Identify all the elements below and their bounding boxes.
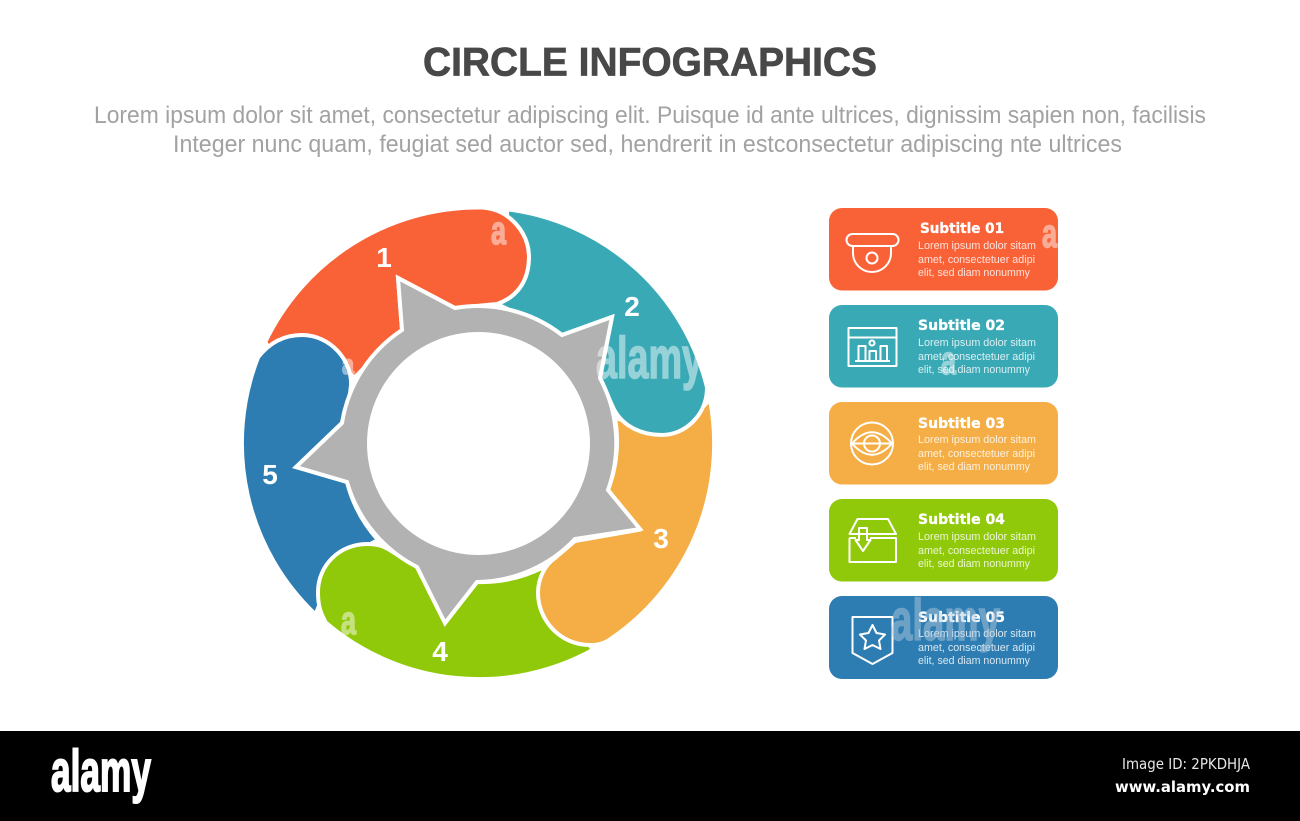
card 01 (829, 208, 1058, 290)
card 01: Subtitle 01 (920, 221, 1004, 237)
card 04: elit, sed diam nonummy (918, 558, 1030, 570)
watermarks: a (341, 599, 357, 643)
watermarks: a (941, 339, 957, 383)
icon: shield with star (852, 617, 892, 664)
card 03: Subtitle 03 (918, 416, 1005, 432)
card 03: Lorem ipsum dolor sitam (918, 434, 1036, 446)
card 05: elit, sed diam nonummy (918, 655, 1030, 667)
segment numbers: 5 (262, 459, 278, 490)
watermarks: a (1042, 212, 1058, 256)
segment 5: blue (242, 335, 378, 614)
intro text block: Lorem ipsum dolor sit amet, consectetur adipiscing elit. Puisque id ante ultrices, dignissim sapien non, facilisis (94, 102, 1206, 129)
website: www.alamy.com (1115, 778, 1250, 796)
watermarks: alamy (891, 588, 1000, 653)
card 05: Subtitle 05 (918, 610, 1005, 626)
segment numbers (262, 242, 669, 667)
card 03: elit, sed diam nonummy (918, 461, 1030, 473)
card 01: elit, sed diam nonummy (918, 267, 1030, 279)
central gray ring with five arrow points (296, 278, 640, 623)
segment 1: orange (265, 207, 529, 378)
card 02: Lorem ipsum dolor sitam (918, 337, 1036, 349)
watermarks: a (342, 349, 354, 380)
intro text block: Integer nunc quam, feugiat sed auctor sed, hendrerit in estconsectetur adipiscing nte ultrices (173, 131, 1122, 158)
segment numbers: 3 (653, 523, 669, 554)
card 05: Lorem ipsum dolor sitam (918, 628, 1036, 640)
card 04: Lorem ipsum dolor sitam (918, 531, 1036, 543)
footer bar (0, 731, 1300, 821)
intro text block (94, 102, 1206, 158)
card 05 (829, 596, 1058, 679)
segment numbers: 2 (624, 291, 640, 322)
card 02 (829, 305, 1058, 388)
segment numbers: 1 (376, 242, 392, 273)
icon: chart window (848, 328, 896, 366)
segment 4: green (318, 544, 593, 679)
segment 3: yellow (538, 400, 714, 645)
circular arrow diagram (242, 207, 714, 679)
card 01: Lorem ipsum dolor sitam (918, 240, 1036, 252)
watermarks: alamy (596, 326, 703, 391)
card 03 (829, 402, 1058, 484)
card 02: elit, sed diam nonummy (918, 364, 1030, 376)
card 02: Subtitle 02 (918, 318, 1005, 334)
image id: Image ID: 2PKDHJA (1122, 755, 1251, 773)
segment 2: teal (497, 209, 707, 435)
title: CIRCLE INFOGRAPHICS (423, 40, 877, 84)
card 04: amet, consectetuer adipi (918, 545, 1035, 557)
card 03: amet, consectetuer adipi (918, 448, 1035, 460)
card 02: amet, consectetuer adipi (918, 351, 1035, 363)
card 05: amet, consectetuer adipi (918, 642, 1035, 654)
footer logo: alamy (51, 739, 151, 804)
icon: eye in circle (851, 422, 893, 464)
card 01: amet, consectetuer adipi (918, 254, 1035, 266)
card 04: Subtitle 04 (918, 512, 1005, 528)
watermarks: a (491, 209, 507, 253)
watermarks (341, 209, 1058, 653)
icon: chest with down arrow (850, 519, 896, 562)
icon: security camera (846, 234, 898, 272)
card 04 (829, 499, 1058, 582)
segment numbers: 4 (432, 636, 448, 667)
